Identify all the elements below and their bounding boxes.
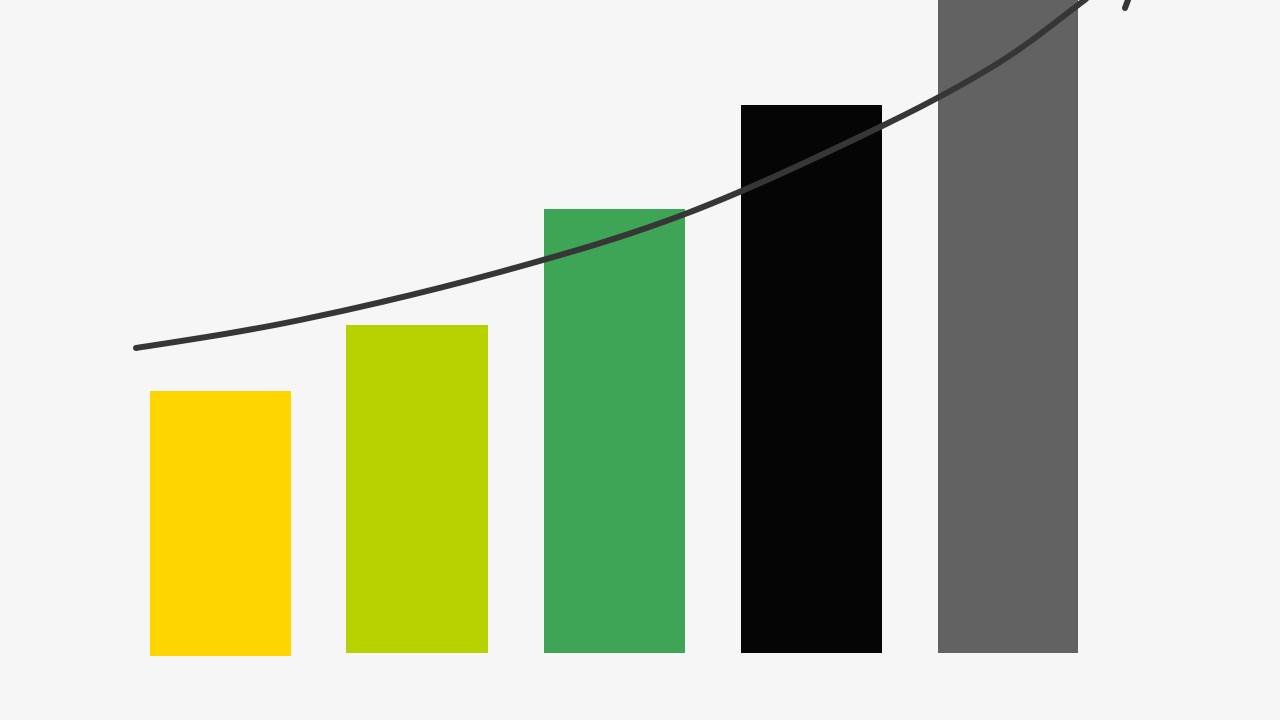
bar 3: green (544, 209, 685, 653)
bar 1: yellow (150, 391, 291, 656)
growth curve (136, 0, 1086, 348)
bar 4: black (741, 105, 882, 653)
arrow tip fragment (1125, 0, 1128, 8)
bar 2: lime (346, 325, 488, 653)
bar 5: gray (938, 0, 1078, 653)
